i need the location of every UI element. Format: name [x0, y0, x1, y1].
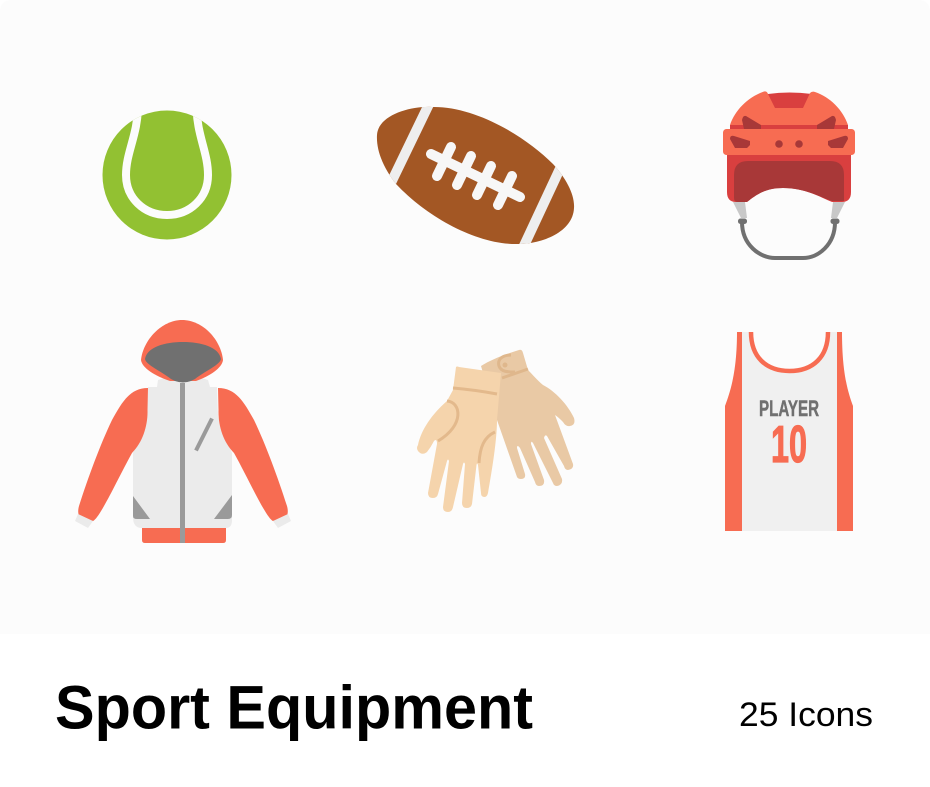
jersey label: PLAYER: PLAYER [759, 396, 819, 421]
jersey number: 10: 10 [771, 416, 807, 474]
front glove [417, 366, 501, 512]
icon: gloves [417, 350, 574, 512]
icon count: 25 Icons [739, 696, 873, 734]
title: Sport Equipment [55, 674, 533, 742]
icon: tennis ball [102, 105, 232, 240]
icon: american football [377, 100, 574, 250]
icon: hooded jacket [75, 320, 291, 543]
back glove [481, 350, 574, 486]
icon: hockey helmet [723, 91, 855, 258]
icon: basketball jersey [725, 332, 853, 531]
